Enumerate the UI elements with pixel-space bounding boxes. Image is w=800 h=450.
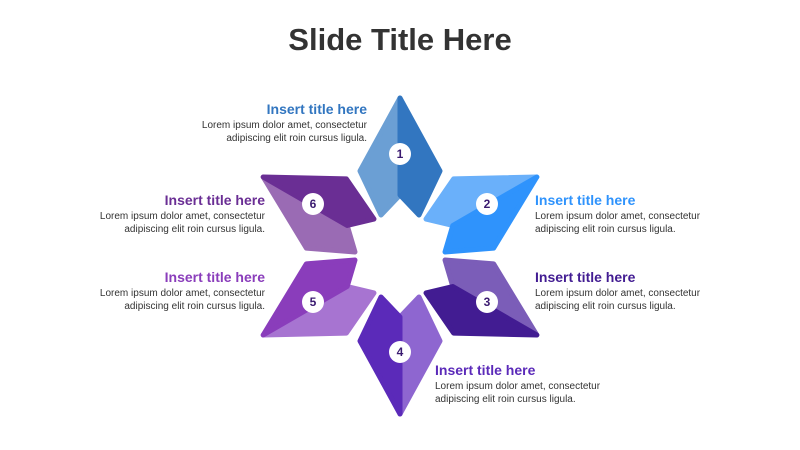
text 4: Lorem ipsum dolor amet, consectetur — [435, 381, 600, 392]
text 5: adipiscing elit roin cursus ligula. — [124, 301, 265, 312]
text 2: Lorem ipsum dolor amet, consectetur — [535, 211, 700, 222]
petal 1 — [360, 98, 440, 215]
text 3: Lorem ipsum dolor amet, consectetur — [535, 288, 700, 299]
petal 2 — [416, 142, 557, 270]
number 6 — [302, 193, 324, 215]
number 1 — [389, 143, 411, 165]
text 6: adipiscing elit roin cursus ligula. — [124, 224, 265, 235]
text 5 — [100, 269, 265, 312]
text 5: Insert title here — [165, 269, 265, 285]
text 6: Lorem ipsum dolor amet, consectetur — [100, 211, 265, 222]
text 5: Lorem ipsum dolor amet, consectetur — [100, 288, 265, 299]
number 2 — [476, 193, 498, 215]
number 4: 4 — [397, 345, 404, 359]
petal 4 — [360, 297, 440, 414]
text 3: Insert title here — [535, 269, 635, 285]
number 5: 5 — [310, 295, 317, 309]
text 2: adipiscing elit roin cursus ligula. — [535, 224, 676, 235]
text 4: Insert title here — [435, 362, 535, 378]
number 1: 1 — [397, 147, 404, 161]
petal 5 — [243, 242, 384, 370]
text 6: Insert title here — [165, 192, 265, 208]
petal 6 — [243, 142, 384, 270]
text 3 — [535, 269, 700, 312]
number 4 — [389, 341, 411, 363]
number 3: 3 — [484, 295, 491, 309]
number 3 — [476, 291, 498, 313]
text 6 — [100, 192, 265, 235]
title: Slide Title Here — [288, 22, 512, 57]
text 3: adipiscing elit roin cursus ligula. — [535, 301, 676, 312]
text 1: Insert title here — [267, 101, 367, 117]
text 1: Lorem ipsum dolor amet, consectetur — [202, 120, 367, 131]
text 2: Insert title here — [535, 192, 635, 208]
text 4: adipiscing elit roin cursus ligula. — [435, 394, 576, 405]
number 2: 2 — [484, 197, 491, 211]
text 4 — [435, 362, 600, 405]
text 1 — [202, 101, 367, 144]
number 5 — [302, 291, 324, 313]
number 6: 6 — [310, 197, 317, 211]
text 1: adipiscing elit roin cursus ligula. — [226, 133, 367, 144]
petal 3 — [416, 242, 557, 370]
text 2 — [535, 192, 700, 235]
